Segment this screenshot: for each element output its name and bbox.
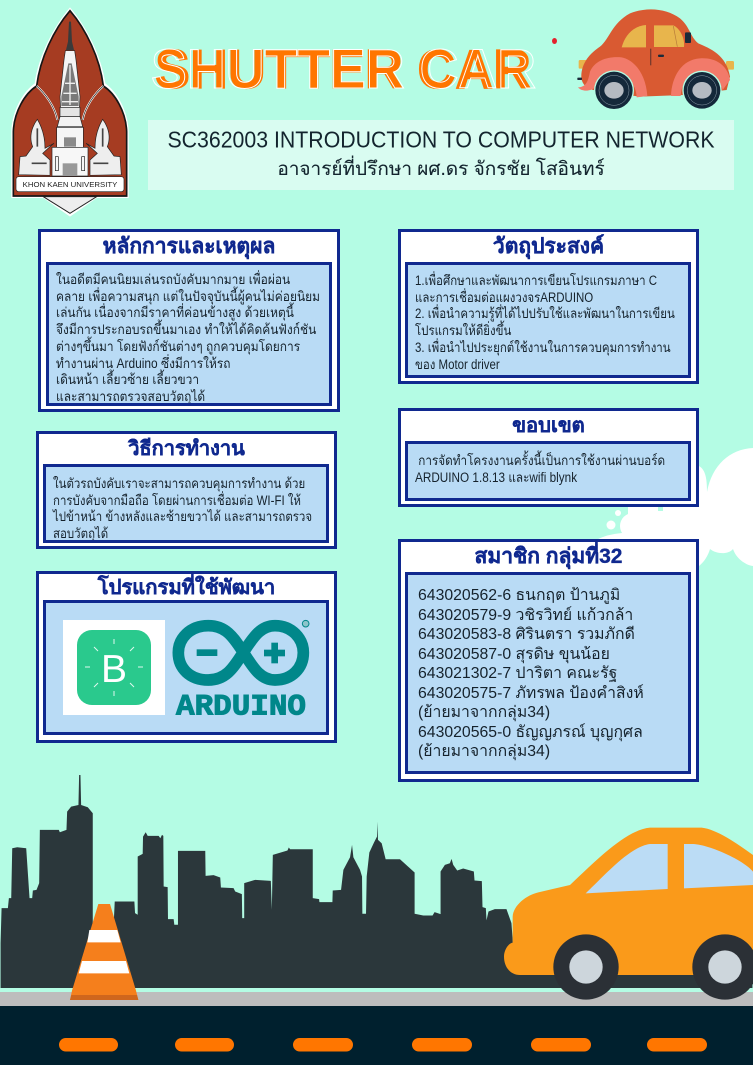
member list: 643020562-6 ธนกฤต ป้านภูมิ xyxy=(418,587,620,604)
paragraph: 3. เพื่อนำไปประยุกต์ใช้งานในการควบคุมการทำงาน xyxy=(415,340,671,355)
member list xyxy=(418,586,644,760)
panel: development programs xyxy=(36,571,337,743)
logo: Khon Kaen University: KHON KAEN UNIVERSITY xyxy=(23,182,118,189)
heading: หลักการและเหตุผล xyxy=(103,235,275,258)
paragraph xyxy=(415,271,675,372)
paragraph: จึงมีการประกอบรถขึ้นมาเอง ทำให้ได้คิดค้นฟังก์ชัน xyxy=(56,322,316,337)
red dot xyxy=(552,38,557,44)
paragraph: ต่างๆขึ้นมา โดยฟังก์ชันต่างๆ ถูกควบคุมโดยการ xyxy=(56,339,300,354)
icon: orange car xyxy=(504,828,753,1000)
member list: 643021302-7 ปาริตา คณะรัฐ xyxy=(418,665,617,682)
paragraph: ในอดีตมีคนนิยมเล่นรถบังคับมากมาย เพื่อผ่อน xyxy=(56,272,290,287)
paragraph: ในตัวรถบังคับเราจะสามารถควบคุมการทำงาน ด้วย xyxy=(53,476,305,491)
text panel xyxy=(43,464,329,543)
paragraph xyxy=(52,476,312,541)
city skyline xyxy=(0,775,752,988)
paragraph: ARDUINO 1.8.13 และwifi blynk xyxy=(415,470,577,485)
paragraph: การจัดทำโครงงานครั้งนี้เป็นการใช้งานผ่านบอร์ด xyxy=(418,453,665,468)
panel: scope xyxy=(398,408,699,507)
text panel xyxy=(405,441,691,501)
paragraph: เล่นกัน เนื่องจากมีราคาที่ค่อนข้างสูง ด้วยเหตุนี้ xyxy=(56,305,294,320)
heading: ขอบเขต xyxy=(512,415,585,437)
heading: วัตถุประสงค์ xyxy=(493,235,604,258)
paragraph: โปรแกรมให้ดียิ่งขึ้น xyxy=(415,323,511,338)
icon: Blynk logo xyxy=(63,620,165,715)
member list: 643020587-0 สุรดิษ ขุนน้อย xyxy=(418,646,610,662)
member list: (ย้ายมาจากกลุ่ม34) xyxy=(418,743,550,760)
heading: สมาชิก กลุ่มที่32 xyxy=(475,545,622,568)
title: SHUTTER CAR xyxy=(155,38,531,100)
icon: Arduino logo: ARDUINO xyxy=(176,691,306,724)
paragraph xyxy=(415,450,665,485)
paragraph: 2. เพื่อนำความรู้ที่ได้ไปปรับใช้และพัฒนาในการเขียน xyxy=(415,306,675,321)
paragraph: 1.เพื่อศึกษาและพัฒนาการเขียนโปรแกรมภาษา C xyxy=(415,273,657,288)
paragraph: ทำงานผ่าน Arduino ซึ่งมีการให้รถ xyxy=(56,356,231,371)
panel: members xyxy=(398,539,699,782)
paragraph: คลาย เพื่อความสนุก แต่ในปัจจุบันนี้ผู้คนไม่ค่อยนิยม xyxy=(56,289,320,304)
member list: 643020579-9 วชิรวิทย์ แก้วกล้า xyxy=(418,606,633,624)
icon: Blynk logo: B xyxy=(101,648,127,691)
paragraph: และการเชื่อมต่อแผงวงจรARDUINO xyxy=(415,290,593,305)
icon: Arduino logo xyxy=(172,620,310,724)
icon: traffic cone xyxy=(70,904,138,1000)
heading: โปรแกรมที่ใช้พัฒนา xyxy=(98,577,275,599)
course title: SC362003 INTRODUCTION TO COMPUTER NETWORK xyxy=(167,127,715,153)
text panel xyxy=(405,262,691,378)
panel: how it works xyxy=(36,431,337,549)
text panel xyxy=(46,262,332,406)
paragraph: เดินหน้า เลี้ยวซ้าย เลี้ยวขวา xyxy=(56,372,199,387)
member list: 643020575-7 ภัทรพล ป้องคำสิงห์ xyxy=(418,684,644,702)
title: SHUTTER CAR xyxy=(151,37,536,100)
paragraph: ของ Motor driver xyxy=(415,357,500,372)
panel: objectives xyxy=(398,229,699,384)
text panel xyxy=(405,572,691,774)
panel: rationale xyxy=(38,229,340,412)
logo: Khon Kaen University xyxy=(11,8,129,216)
advisor: อาจารย์ที่ปรึกษา ผศ.ดร จักรชัย โสอินทร์ xyxy=(277,159,605,180)
member list: (ย้ายมาจากกลุ่ม34) xyxy=(418,704,550,721)
heading: วิธีการทำงาน xyxy=(128,438,245,460)
logos panel xyxy=(43,600,329,735)
paragraph xyxy=(56,270,320,404)
icon: red car xyxy=(577,9,734,109)
paragraph: สอบวัตถุได้ xyxy=(53,526,108,541)
course banner xyxy=(148,120,734,190)
paragraph: และสามารถตรวจสอบวัตถุได้ xyxy=(56,389,205,404)
member list: 643020583-8 ศิรินตรา รวมภักดี xyxy=(418,626,635,643)
road xyxy=(0,992,753,1065)
paragraph: ไปข้าหน้า ข้างหลังและซ้ายขวาได้ และสามารถตรวจ xyxy=(53,509,312,524)
member list: 643020565-0 ธัญญภรณ์ บุญกุศล xyxy=(418,724,643,740)
paragraph: การบังคับจากมือถือ โดยผ่านการเชื่อมต่อ WI-FI ให้ xyxy=(53,493,301,508)
